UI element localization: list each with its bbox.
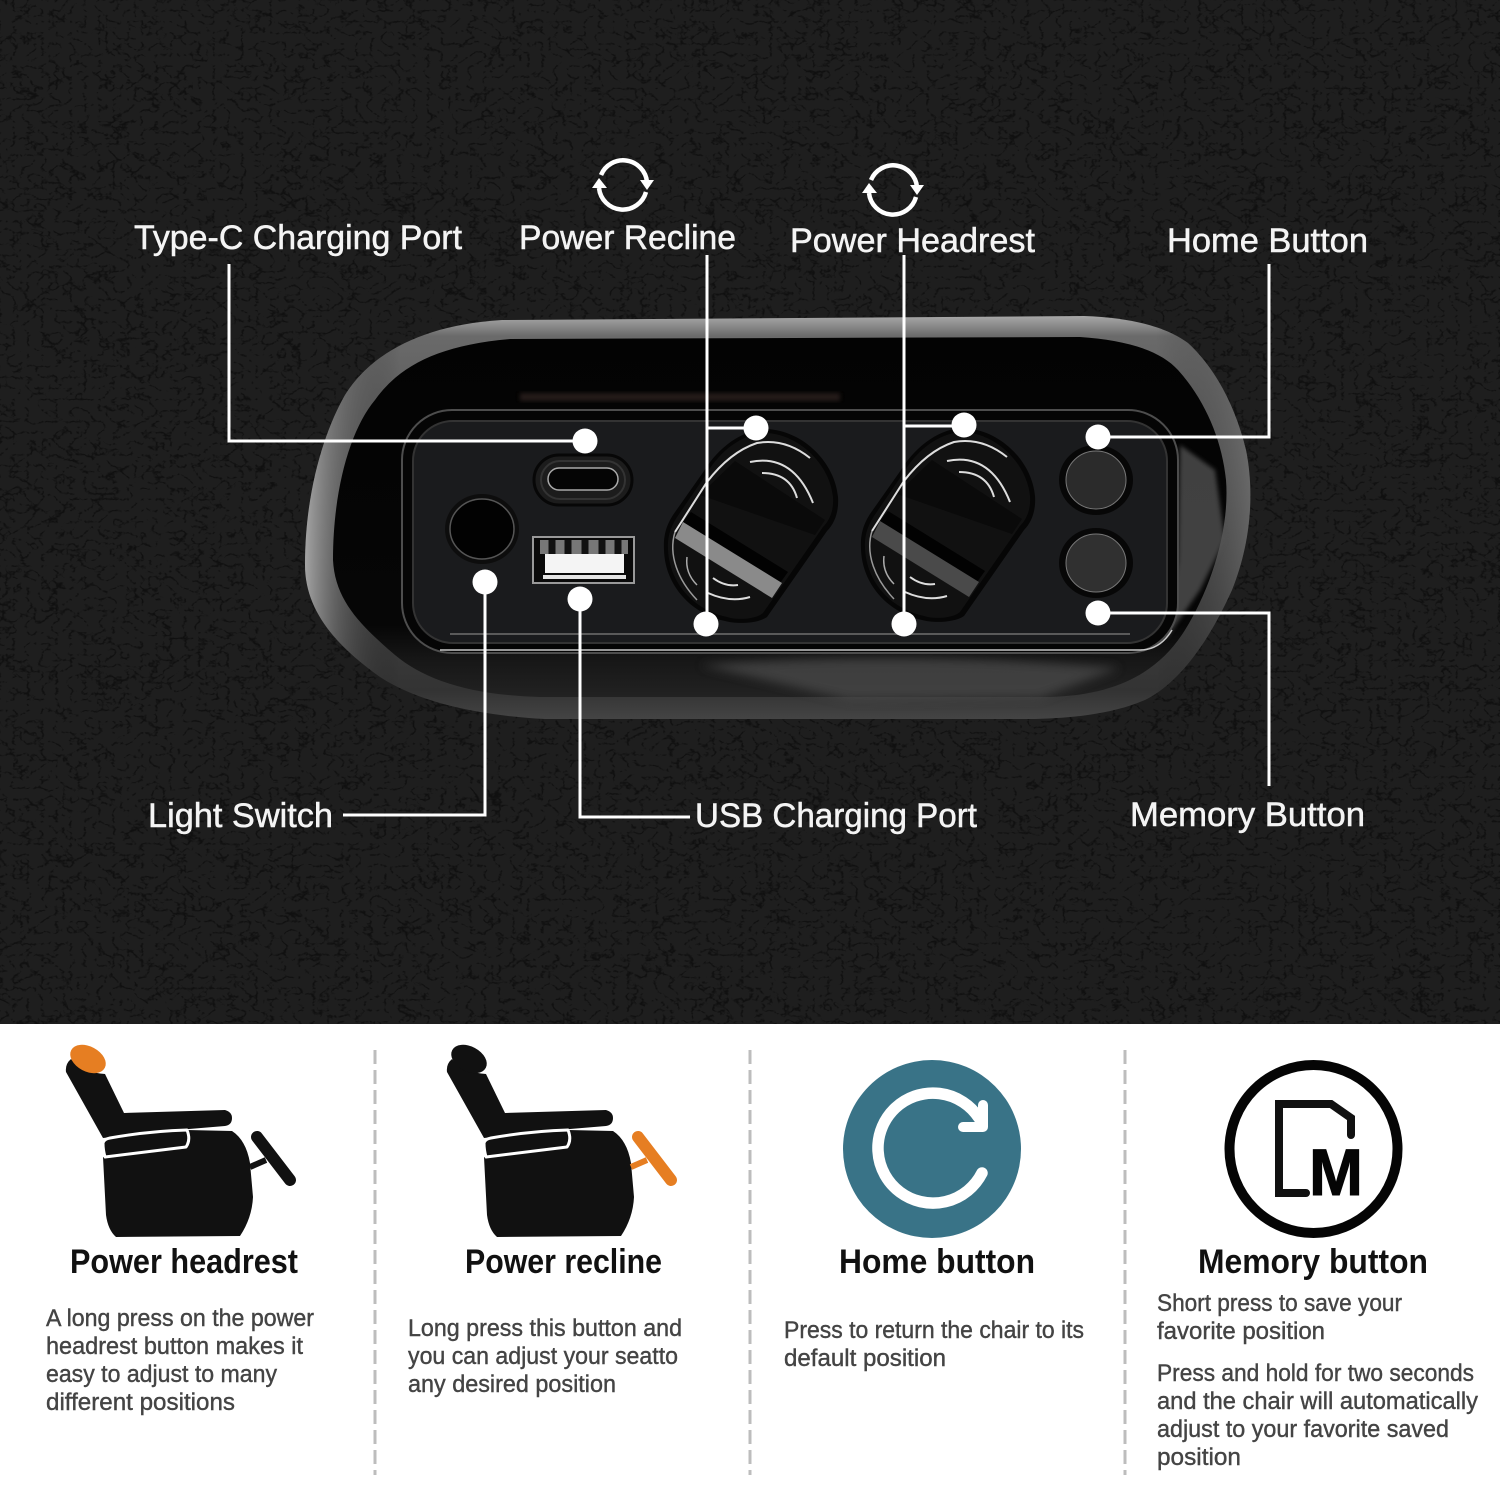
label: Memory Button: Memory Button xyxy=(1130,796,1365,834)
icon: memory circle xyxy=(1230,1065,1398,1233)
callout lines and dots xyxy=(229,255,1269,817)
description: easy to adjust to many xyxy=(46,1361,277,1388)
description xyxy=(46,1305,314,1416)
icon: memory circle: M xyxy=(1309,1135,1363,1209)
column: power recline xyxy=(408,1039,682,1398)
recessed plate xyxy=(402,410,1178,653)
heading: Power recline: Power recline xyxy=(465,1243,662,1281)
description: short press: Short press to save your xyxy=(1157,1290,1402,1317)
description: press and hold xyxy=(1157,1360,1478,1471)
label: USB Charging Port: USB Charging Port xyxy=(695,797,978,835)
control panel photo xyxy=(305,316,1250,719)
description: press and hold: adjust to your favorite saved xyxy=(1157,1416,1449,1443)
power recline rocker xyxy=(664,429,838,623)
description: different positions xyxy=(46,1389,235,1416)
icon: headrest rotation arrows xyxy=(862,165,924,215)
description: short press xyxy=(1157,1290,1402,1345)
description: headrest button makes it xyxy=(46,1333,303,1360)
description: press and hold: Press and hold for two seconds xyxy=(1157,1360,1474,1387)
label: Power Recline: Power Recline xyxy=(519,219,736,257)
memory and home buttons xyxy=(1059,445,1133,598)
heading: Home button: Home button xyxy=(839,1243,1035,1281)
label: Power Headrest: Power Headrest xyxy=(790,222,1036,260)
power headrest rocker xyxy=(861,428,1035,622)
type-C port xyxy=(534,455,632,505)
label: Type-C Charging Port: Type-C Charging Port xyxy=(134,219,463,257)
icon: chair with highlighted footrest xyxy=(446,1039,671,1237)
description: A long press on the power xyxy=(46,1305,314,1332)
description: default position xyxy=(784,1345,946,1372)
background: black leather xyxy=(0,0,1500,1024)
label: Light Switch: Light Switch xyxy=(148,797,333,835)
description: any desired position xyxy=(408,1371,616,1398)
icon: home reset circle xyxy=(843,1060,1021,1238)
description xyxy=(408,1315,682,1398)
column: power headrest xyxy=(46,1039,314,1416)
USB port xyxy=(533,537,634,583)
column: memory button xyxy=(1157,1065,1478,1471)
description xyxy=(784,1317,1084,1372)
icon: chair with highlighted headrest xyxy=(65,1039,290,1237)
description: short press: favorite position xyxy=(1157,1318,1325,1345)
column: home button xyxy=(784,1060,1084,1372)
description: Long press this button and xyxy=(408,1315,682,1342)
label: Home Button: Home Button xyxy=(1167,222,1368,260)
heading: Memory button: Memory button xyxy=(1198,1243,1428,1281)
chrome bezel xyxy=(305,316,1250,719)
column dividers xyxy=(375,1050,1125,1475)
icon: recline rotation arrows xyxy=(592,160,654,210)
description: Press to return the chair to its xyxy=(784,1317,1084,1344)
light switch button xyxy=(445,494,519,564)
description: press and hold: position xyxy=(1157,1444,1241,1471)
heading: Power headrest: Power headrest xyxy=(70,1243,298,1281)
description: you can adjust your seatto xyxy=(408,1343,678,1370)
lower white panel xyxy=(0,1024,1500,1500)
description: press and hold: and the chair will automatically xyxy=(1157,1388,1478,1415)
